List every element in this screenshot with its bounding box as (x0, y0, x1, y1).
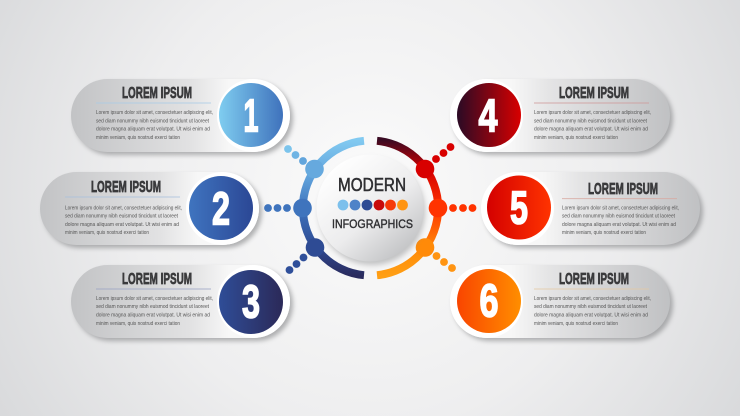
body text 3: minim veniam, quis nostrud exerci tation (96, 321, 180, 327)
heading 4: LOREM IPSUM (559, 85, 629, 102)
body text 2: minim veniam, quis nostrud exerci tation (65, 230, 149, 236)
heading 3: LOREM IPSUM (122, 271, 192, 288)
central hub (316, 154, 425, 265)
number circle 3: 3 (242, 276, 260, 328)
body text 6 (534, 296, 651, 327)
body text 5: sed diam nonummy nibh euismod tincidunt ut laoreet (562, 214, 675, 220)
body text 6: sed diam nonummy nibh euismod tincidunt ut laoreet (534, 304, 647, 310)
body text 1: dolore magna aliquam erat volutpat. Ut wisi enim ad (96, 127, 210, 133)
body text 4: dolore magna aliquam erat volutpat. Ut wisi enim ad (534, 127, 648, 133)
hub colour dots (338, 200, 408, 210)
connector dots left (264, 145, 307, 274)
body text 1 (96, 110, 213, 141)
number circle 5: 5 (510, 182, 528, 234)
panel 5 (481, 172, 703, 248)
hub title top: MODERN (338, 175, 406, 195)
body text 6: minim veniam, quis nostrud exerci tation (534, 321, 618, 327)
ring left arc with nodes (293, 141, 364, 275)
heading 5: LOREM IPSUM (588, 181, 658, 198)
body text 6: Lorem ipsum dolor sit amet, consectetuer adipiscing elit, (534, 296, 651, 302)
hub title bottom: INFOGRAPHICS (332, 217, 413, 231)
number circle 1 (219, 83, 283, 147)
body text 3 (96, 296, 213, 327)
body text 3: Lorem ipsum dolor sit amet, consectetuer adipiscing elit, (96, 296, 213, 302)
number circle 1: 1 (244, 90, 258, 142)
body text 1: sed diam nonummy nibh euismod tincidunt ut laoreet (96, 118, 209, 124)
panel 2 (40, 172, 262, 248)
number circle 3 (219, 270, 283, 334)
body text 5 (562, 206, 679, 236)
body text 5: Lorem ipsum dolor sit amet, consectetuer adipiscing elit, (562, 206, 679, 212)
body text 6: dolore magna aliquam erat volutpat. Ut wisi enim ad (534, 312, 648, 318)
panel 6 (450, 265, 673, 341)
number circle 6 (457, 269, 521, 333)
body text 2 (65, 206, 182, 236)
body text 4: sed diam nonummy nibh euismod tincidunt ut laoreet (534, 118, 647, 124)
heading 6: LOREM IPSUM (559, 271, 629, 288)
heading 1: LOREM IPSUM (122, 85, 192, 102)
body text 1: minim veniam, quis nostrud exerci tation (96, 135, 180, 141)
body text 2: dolore magna aliquam erat volutpat. Ut wisi enim ad (65, 222, 179, 228)
body text 4: Lorem ipsum dolor sit amet, consectetuer adipiscing elit, (534, 110, 651, 116)
panel 4 (450, 79, 673, 155)
number circle 5 (487, 176, 551, 240)
body text 4: minim veniam, quis nostrud exerci tation (534, 135, 618, 141)
body text 2: sed diam nonummy nibh euismod tincidunt ut laoreet (65, 214, 178, 220)
number circle 4 (457, 83, 521, 147)
panel 3 (71, 265, 293, 341)
body text 3: sed diam nonummy nibh euismod tincidunt ut laoreet (96, 304, 209, 310)
body text 5: minim veniam, quis nostrud exerci tation (562, 230, 646, 236)
number circle 2 (189, 176, 253, 240)
number circle 2: 2 (212, 182, 230, 234)
ring right arc with nodes (377, 141, 447, 275)
heading 2: LOREM IPSUM (91, 179, 161, 196)
body text 5: dolore magna aliquam erat volutpat. Ut wisi enim ad (562, 222, 676, 228)
panel 1 (71, 79, 293, 155)
number circle 4: 4 (478, 90, 498, 142)
body text 2: Lorem ipsum dolor sit amet, consectetuer adipiscing elit, (65, 206, 182, 212)
number circle 6: 6 (480, 274, 498, 326)
connector dots right (432, 143, 476, 272)
body text 3: dolore magna aliquam erat volutpat. Ut wisi enim ad (96, 312, 210, 318)
body text 1: Lorem ipsum dolor sit amet, consectetuer adipiscing elit, (96, 110, 213, 116)
body text 4 (534, 110, 651, 141)
